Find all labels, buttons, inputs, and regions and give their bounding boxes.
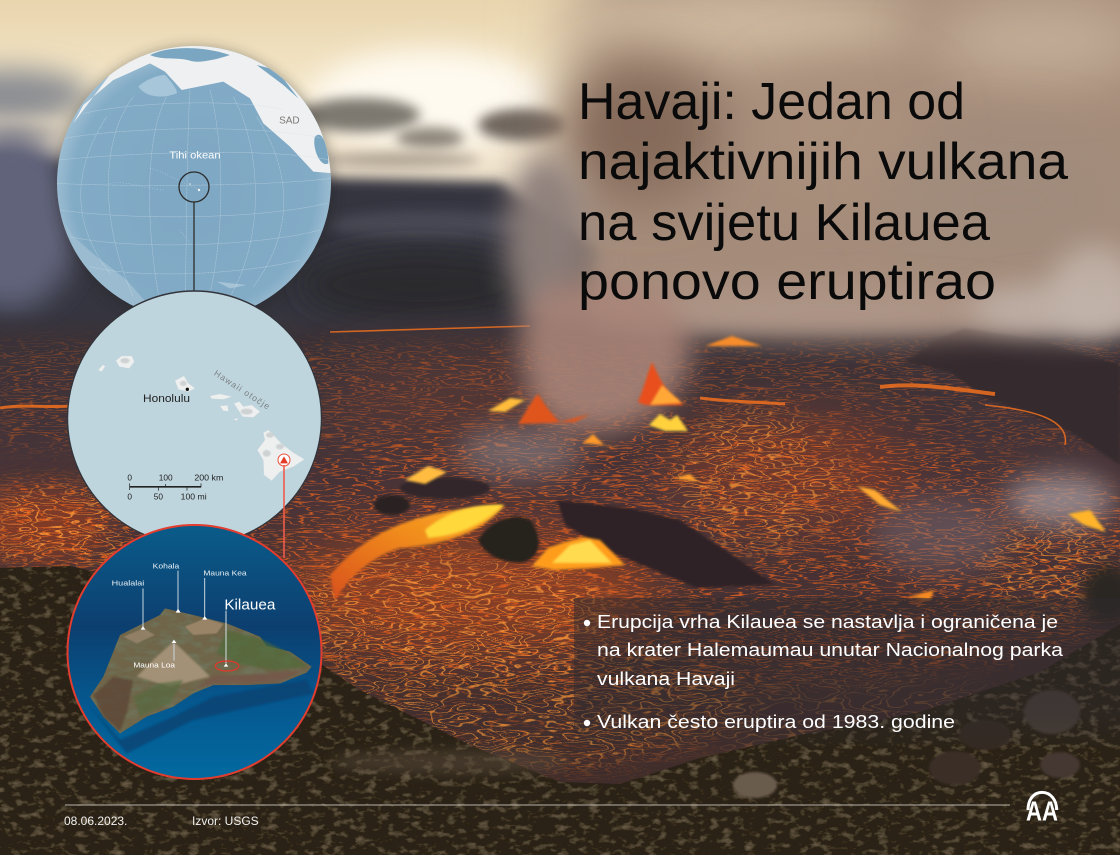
scale bar: 200 km	[194, 473, 223, 483]
lava veins	[0, 345, 1120, 780]
title: ponovo eruptirao	[578, 253, 996, 311]
dark crater wall	[0, 150, 600, 350]
scale bar: 100	[159, 473, 173, 483]
Arctic ocean	[150, 48, 230, 62]
label: SAD: SAD	[279, 116, 300, 127]
lava glow	[280, 530, 660, 650]
red leader line	[283, 465, 285, 558]
scale bar: 0	[127, 473, 132, 483]
island terrain	[90, 608, 312, 733]
title: Havaji: Jedan od	[578, 73, 965, 131]
dark rock on right rim	[905, 328, 1120, 465]
summit labels: Kilauea	[224, 597, 276, 613]
land: North America and Asia	[73, 40, 337, 173]
footer rule	[65, 804, 1010, 806]
Hudson bay	[257, 65, 298, 98]
source: Izvor: USGS	[192, 814, 259, 828]
Kilauea highlight ring	[215, 661, 239, 671]
summit labels	[112, 561, 276, 670]
summit labels: Mauna Kea	[203, 569, 247, 578]
Bering sea	[138, 75, 177, 97]
clouds at horizon	[0, 69, 566, 168]
smoke veil along crater edge	[600, 284, 1120, 338]
Australia and Oceania shallows	[61, 216, 144, 306]
summit labels: Hualalai	[112, 578, 145, 587]
orange rim streaks	[0, 326, 1065, 445]
text panel: eruption facts	[574, 598, 1120, 745]
lava lake	[0, 310, 1120, 800]
smoke cloud upper right	[505, 0, 1120, 345]
date: 08.06.2023.	[64, 814, 127, 828]
scale bar: 50	[154, 492, 163, 502]
fact 1: Erupcija vrha Kilauea se nastavlja i ograničena je	[597, 612, 1058, 632]
fact 1: na krater Halemaumau unutar Nacionalnog parka	[597, 640, 1064, 660]
icon: AA logo: AA	[1026, 795, 1058, 826]
scale bar: 0	[127, 492, 132, 502]
title: na svijetu Kilauea	[578, 194, 990, 252]
label: Pacific Ocean: Tihi okean	[169, 151, 221, 162]
central smoke plume	[458, 245, 1120, 573]
foreground rocks	[0, 566, 1120, 855]
Pacific island chains	[110, 168, 200, 243]
island relief shading	[120, 358, 284, 457]
graticule	[55, 90, 332, 307]
fact 2: Vulkan često eruptira od 1983. godine	[597, 712, 955, 732]
Gulf of Mexico	[314, 135, 328, 164]
label: Hawaii archipelago: Hawaii otočje	[212, 368, 273, 412]
summit labels: Mauna Loa	[133, 661, 176, 670]
locator circle and leader	[179, 172, 209, 292]
summit labels: Kohala	[153, 561, 180, 570]
regional map: Hawaiian islands	[68, 291, 322, 545]
scale bar: 100 mi	[181, 492, 207, 502]
title	[578, 73, 1068, 311]
fact 1	[584, 612, 1064, 689]
label: Honolulu: Honolulu	[143, 393, 190, 405]
summit leaders and markers	[141, 571, 228, 667]
globe map	[54, 40, 337, 326]
vents, cones and lava flow	[330, 336, 1106, 600]
fact 1: vulkana Havaji	[597, 669, 735, 689]
volcano marker	[278, 454, 290, 466]
Honolulu marker	[186, 388, 189, 391]
island shadow	[90, 680, 313, 753]
scale bar	[127, 473, 223, 502]
islands	[98, 356, 304, 481]
title: najaktivnijih vulkana	[578, 133, 1068, 191]
sunlit sky	[310, 50, 550, 150]
3D map: Big Island volcanoes	[68, 525, 322, 779]
